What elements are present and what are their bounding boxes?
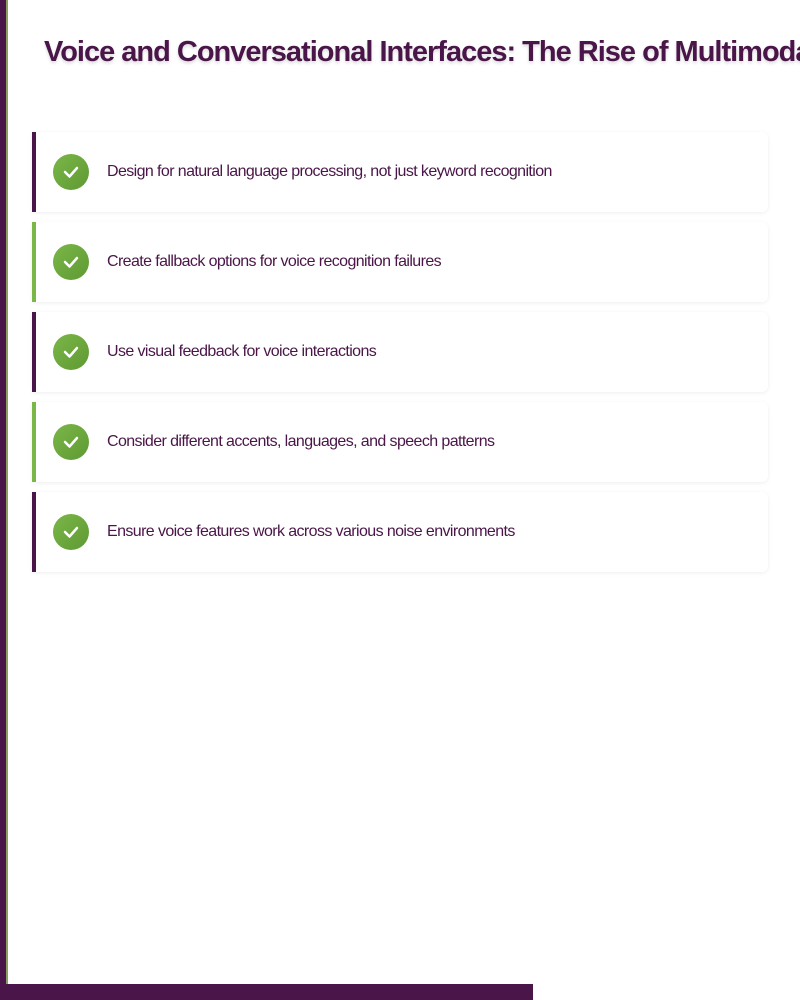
icon: check bbox=[53, 244, 89, 280]
icon: check bbox=[53, 334, 89, 370]
text: Consider different accents, languages, and speech patterns bbox=[107, 433, 494, 450]
icon: check bbox=[53, 154, 89, 190]
card 5 bbox=[32, 492, 768, 572]
card 2 bbox=[32, 222, 768, 302]
card 1 bbox=[32, 132, 768, 212]
card 4 bbox=[32, 402, 768, 482]
icon: check bbox=[53, 424, 89, 460]
icon: check bbox=[53, 514, 89, 550]
text: Use visual feedback for voice interactions bbox=[107, 343, 376, 360]
card 3 bbox=[32, 312, 768, 392]
text: Create fallback options for voice recognition failures bbox=[107, 253, 441, 270]
text: Design for natural language processing, not just keyword recognition bbox=[107, 163, 552, 180]
text: Ensure voice features work across various noise environments bbox=[107, 523, 515, 540]
